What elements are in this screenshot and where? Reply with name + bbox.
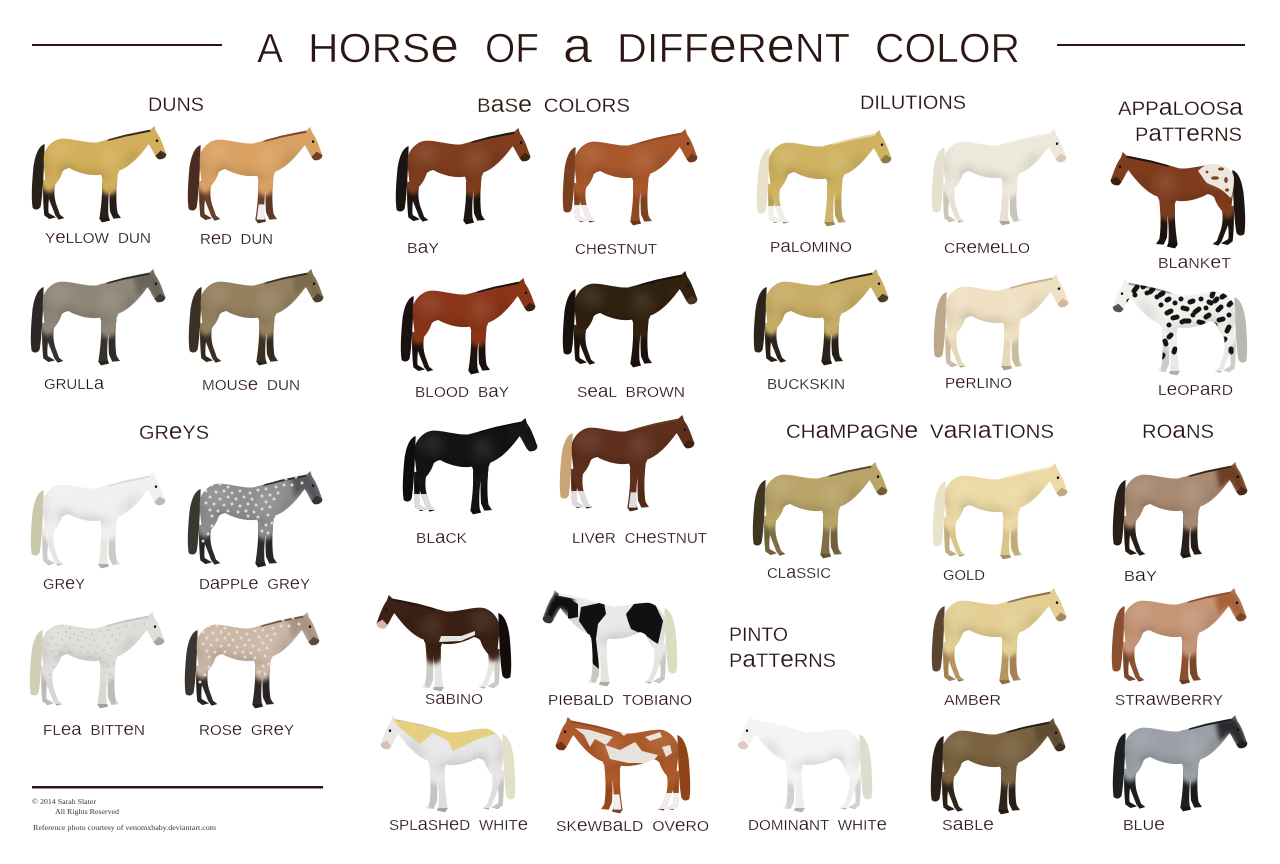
horse: blue roan — [1113, 715, 1247, 812]
heading: dilutions: DILUTIONS — [860, 92, 966, 114]
horse: strawberry roan — [1112, 588, 1246, 685]
heading line 1: PINTO — [729, 624, 788, 646]
label: gold: GOLD — [943, 567, 985, 584]
heading: greys: GReYS — [139, 418, 209, 445]
horse: liver chestnut — [560, 415, 694, 512]
reference credit: Reference photo courtesy of venomxbaby.deviantart.com — [33, 823, 216, 832]
panel: roans — [1112, 417, 1247, 834]
label: liver chestnut: LIVeR CHeSTNUT — [572, 526, 707, 547]
label: chestnut: CHeSTNUT — [575, 237, 657, 258]
horse: grulla — [31, 269, 165, 366]
label: grulla: GRULLa — [44, 372, 105, 393]
heading: roans: ROaNS — [1142, 417, 1214, 444]
label: grey: GReY — [43, 572, 85, 593]
panel: greys — [30, 418, 322, 739]
label: blanket: BLaNKeT — [1158, 251, 1231, 272]
rights: All Rights Reserved — [55, 807, 119, 816]
rule right — [1057, 44, 1245, 46]
panel: base colors — [396, 91, 707, 547]
horse: palomino — [757, 130, 891, 227]
horse: flea bitten — [30, 612, 164, 709]
horse: seal brown — [563, 271, 697, 368]
panel: appaloosa patterns — [1111, 94, 1247, 399]
title: DIFFeReNT — [617, 18, 850, 73]
horse: dominant white — [738, 716, 872, 813]
label: dapple grey: DaPPLe GReY — [199, 572, 310, 593]
horse: rose grey — [185, 612, 319, 709]
horse: dapple grey — [188, 471, 322, 568]
label: skewbald overo: SKeWBaLD OVeRO — [556, 814, 709, 835]
heading line 2: PaTTeRNS — [729, 646, 836, 673]
title banner — [32, 18, 1245, 73]
horse: gold — [933, 463, 1067, 560]
label: yellow dun: YeLLOW DUN — [45, 226, 151, 247]
horse: buckskin — [754, 269, 888, 366]
label: sabino: SaBINO — [425, 687, 483, 708]
copyright: © 2014 Sarah Slater — [32, 797, 97, 806]
label: leopard: LeOPaRD — [1158, 378, 1233, 399]
horse: cremello — [932, 129, 1066, 226]
title: a — [563, 18, 593, 73]
horse: skewbald overo — [556, 717, 690, 814]
horse: bay roan — [1113, 462, 1247, 559]
label: seal brown: SeaL BROWN — [577, 380, 685, 401]
horse: bay — [396, 128, 530, 225]
label: sable: SaBLe — [942, 813, 994, 834]
label: blue roan: BLUe — [1123, 813, 1165, 834]
horse: piebald tobiano — [543, 590, 677, 687]
label: bay roan: BaY — [1124, 564, 1157, 585]
horse: classic — [753, 462, 887, 559]
label: bay: BaY — [407, 236, 439, 257]
horse: mouse dun — [189, 269, 323, 366]
horse: amber — [932, 588, 1066, 685]
credits block — [32, 786, 323, 832]
label: piebald tobiano: PIeBaLD TOBIaNO — [548, 688, 692, 709]
horse: sable — [931, 718, 1065, 815]
label: palomino: PaLOMINO — [770, 235, 852, 256]
footer rule — [32, 786, 323, 788]
panel: dilutions — [754, 92, 1068, 393]
heading: appaloosa patterns — [1118, 94, 1244, 147]
horse: leopard — [1113, 279, 1247, 376]
panel: duns — [31, 94, 323, 394]
horse: blanket — [1111, 152, 1245, 249]
heading: champagne variations: CHaMPaGNe VaRIaTIONS — [786, 417, 1054, 444]
horse: splashed white — [381, 716, 515, 813]
label: blood bay: BLOOD BaY — [415, 380, 509, 401]
heading: pinto patterns — [729, 624, 836, 673]
label: perlino: PeRLINO — [945, 371, 1012, 392]
horse: black — [403, 418, 537, 515]
label: rose grey: ROSe GReY — [199, 718, 294, 739]
label: dominant white: DOMINaNT WHITe — [748, 813, 887, 834]
rule left — [32, 44, 222, 46]
horse: perlino — [934, 274, 1068, 371]
label: strawberry roan: STRaWBeRRY — [1115, 688, 1223, 709]
label: black: BLaCK — [416, 526, 467, 547]
label: flea bitten: FLea BITTeN — [43, 718, 145, 739]
label: splashed white: SPLaSHeD WHITe — [389, 813, 528, 834]
heading line 1: APPaLOOSa — [1118, 94, 1244, 121]
horse: yellow dun — [32, 126, 166, 223]
horse: sabino — [377, 595, 511, 692]
title: OF — [485, 25, 539, 71]
label: mouse dun: MOUSe DUN — [202, 373, 300, 394]
horse: red dun — [188, 127, 322, 224]
panel: champagne variations — [753, 417, 1067, 834]
horse: grey — [31, 472, 165, 569]
heading: base colors: BaSe COLORS — [477, 91, 630, 118]
title: HORSe — [308, 18, 459, 73]
label: red dun: ReD DUN — [200, 227, 273, 248]
heading line 2: PaTTeRNS — [1135, 120, 1242, 147]
label: classic: CLaSSIC — [767, 561, 831, 582]
title: COLOR — [875, 25, 1020, 71]
title — [257, 18, 1020, 73]
horse: blood bay — [401, 278, 535, 375]
label: cremello: CReMeLLO — [944, 236, 1030, 257]
label: amber: AMBeR — [944, 688, 1001, 709]
horse: chestnut — [563, 129, 697, 226]
title: A — [257, 25, 283, 71]
panel: pinto patterns — [377, 590, 887, 835]
heading: duns: DUNS — [148, 94, 204, 116]
label: buckskin: BUCKSKIN — [767, 376, 845, 393]
